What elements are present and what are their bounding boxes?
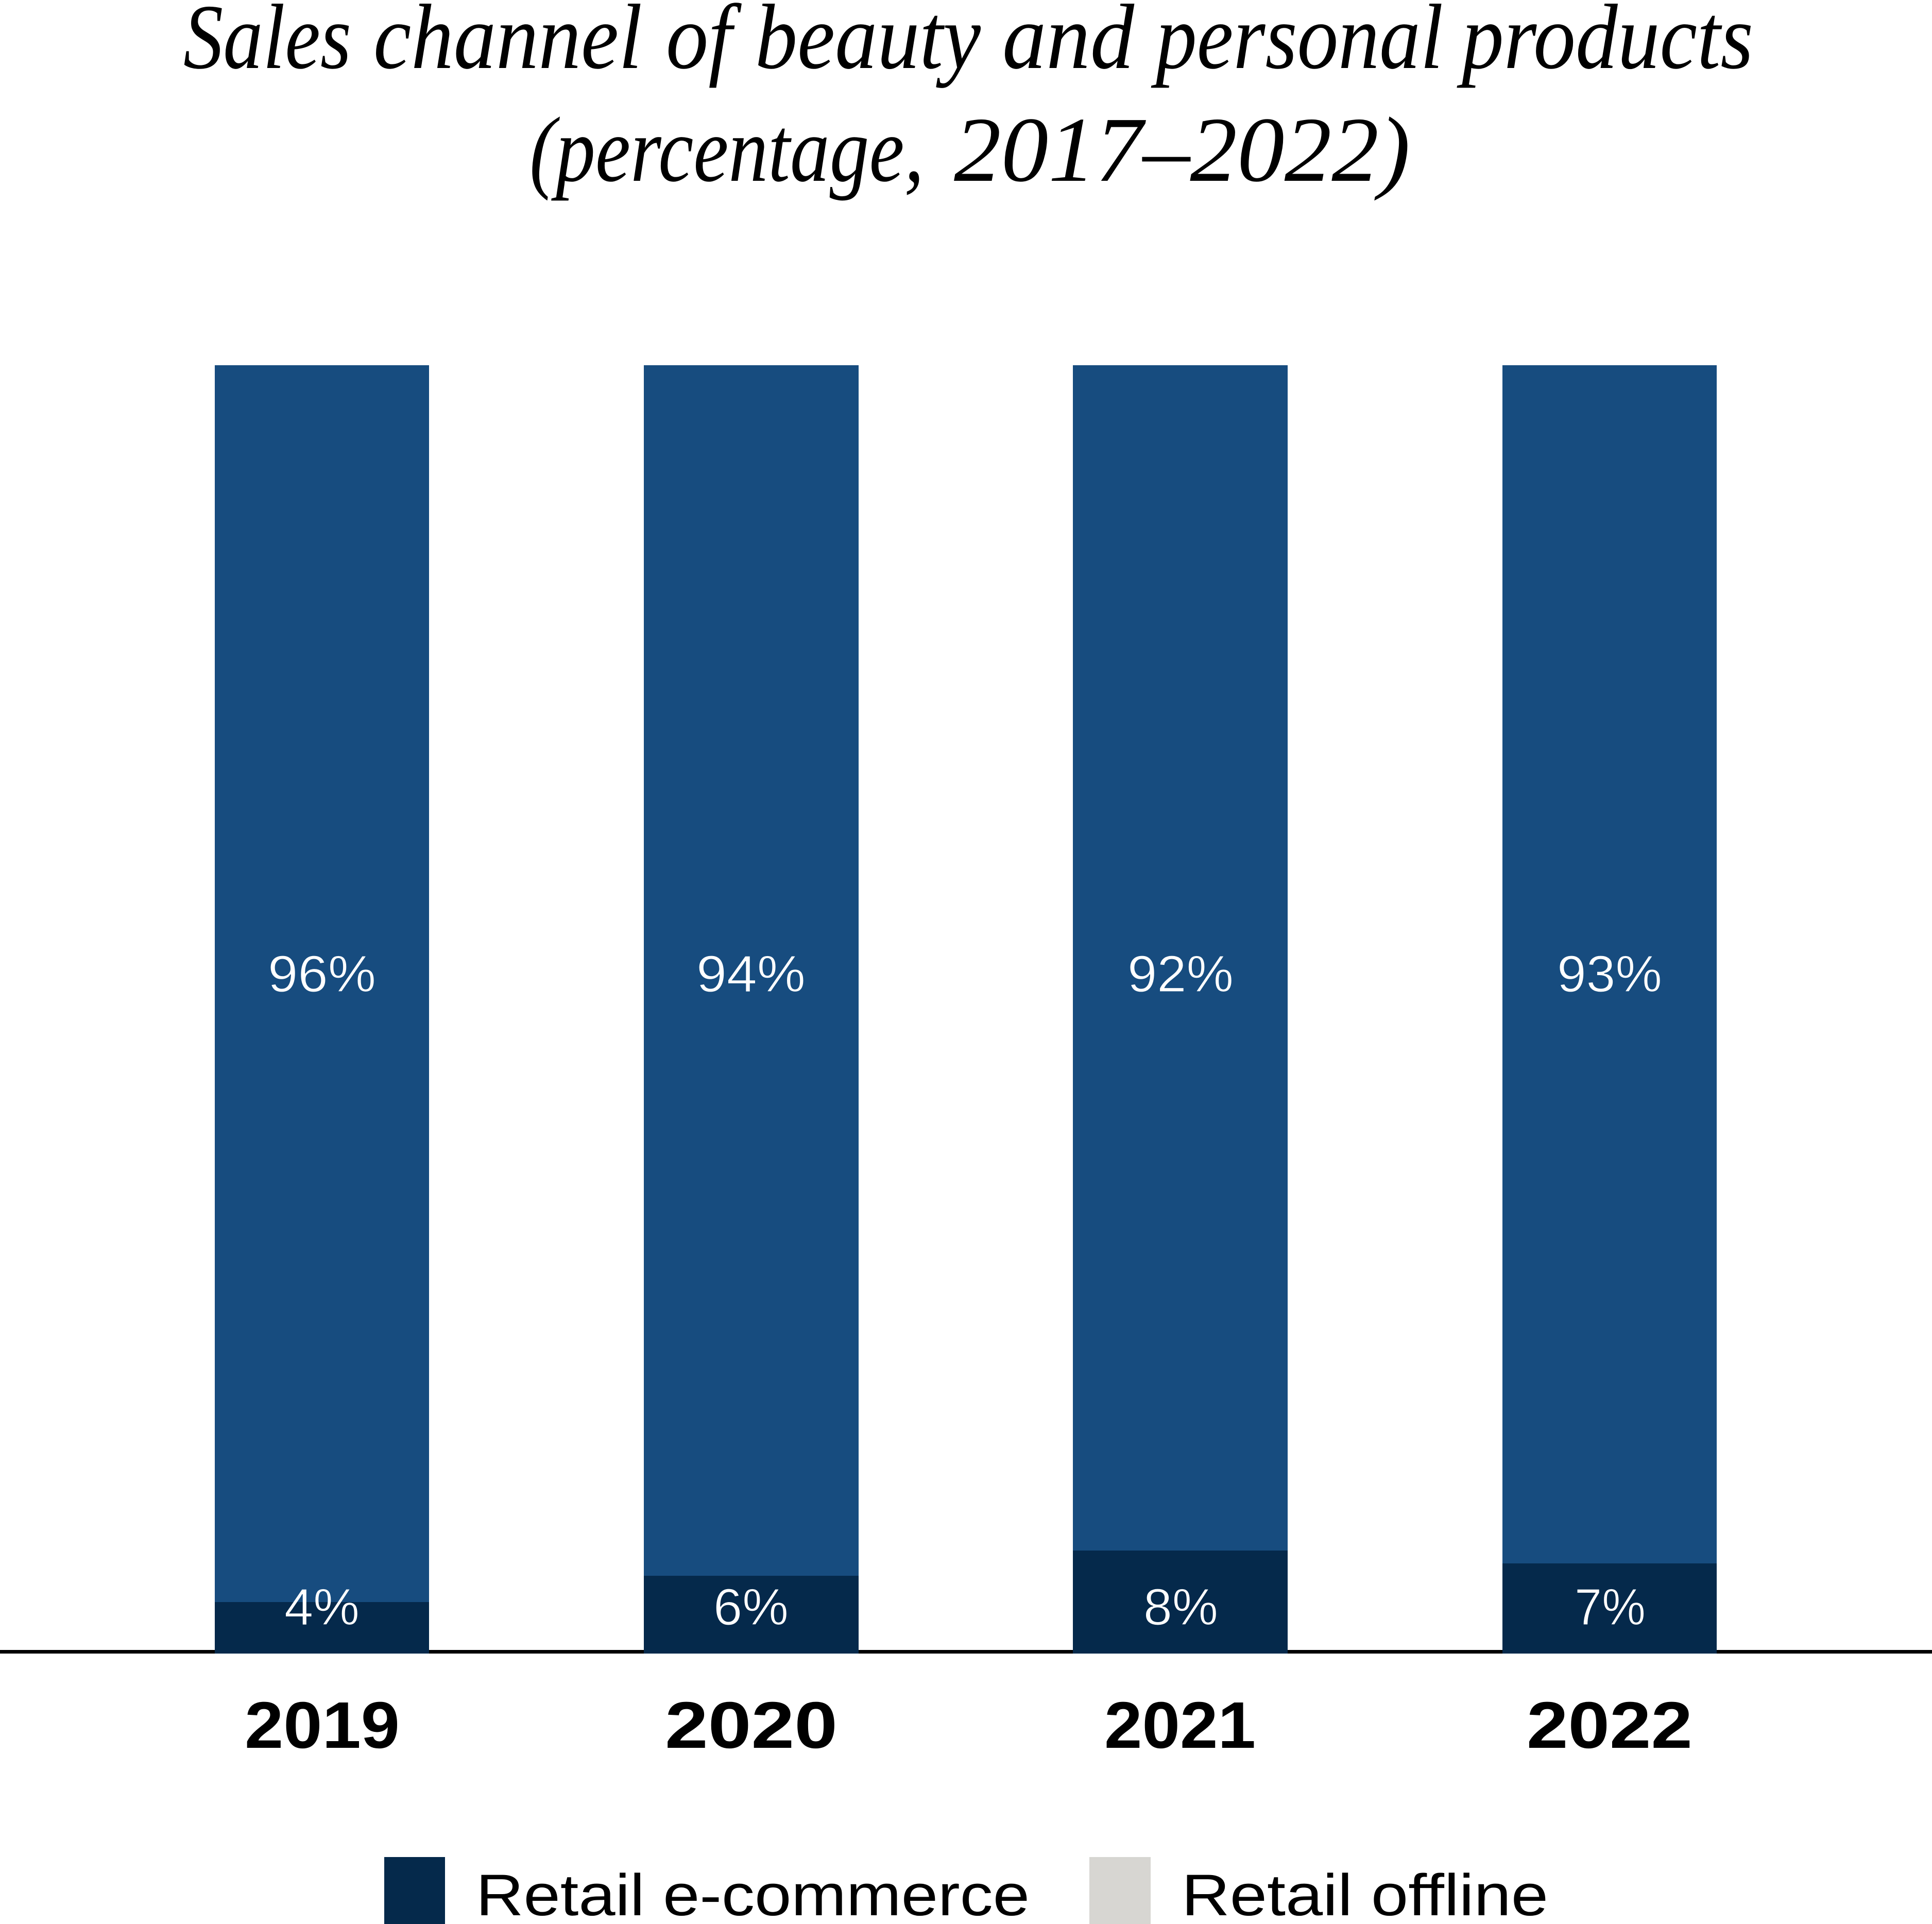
legend item: retail e-commerce (384, 1857, 1030, 1924)
bar: 2022 (1502, 365, 1717, 1654)
title (183, 0, 1753, 201)
bar: 2021: 92% (1127, 945, 1234, 1003)
bar: 2019 (215, 365, 429, 1654)
bar chart (0, 365, 1932, 1762)
year labels: 2020 (665, 1689, 837, 1762)
bar: 2020: 94% (696, 945, 806, 1003)
year labels (245, 1689, 1692, 1762)
title: (percentage, (529, 98, 924, 201)
legend (384, 1857, 1548, 1924)
title: 2017–2022) (954, 98, 1410, 201)
year labels: 2021 (1104, 1689, 1256, 1762)
legend item: retail offline (1089, 1857, 1548, 1924)
axis line (0, 1650, 1932, 1654)
year labels: 2019 (245, 1689, 400, 1762)
bar: 2022: 93% (1557, 945, 1662, 1003)
bar: 2021: 8% (1143, 1578, 1218, 1636)
bar: 2020: 6% (713, 1578, 789, 1636)
year labels: 2022 (1527, 1689, 1692, 1762)
bar: 2019: 4% (284, 1578, 360, 1636)
bar: 2019: 96% (268, 945, 376, 1003)
bar: 2020 (644, 365, 859, 1654)
bar: 2022: 7% (1575, 1578, 1646, 1636)
bar: 2021 (1073, 365, 1288, 1654)
